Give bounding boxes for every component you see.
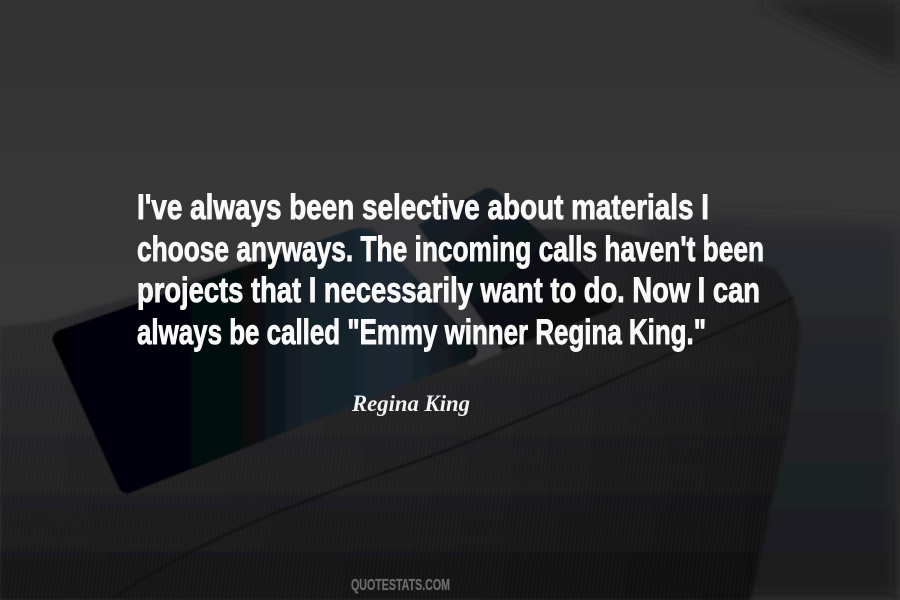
sofa <box>0 222 801 600</box>
author: Regina King <box>351 391 470 416</box>
quote text: I've always been selective about materials I <box>137 188 709 227</box>
quote text <box>137 188 764 352</box>
front tablet <box>53 228 477 493</box>
quote text: always be called "Emmy winner Regina King." <box>137 313 706 352</box>
source watermark: QUOTESTATS.COM <box>351 577 450 594</box>
back tablet <box>418 188 612 350</box>
background: floor <box>640 215 900 600</box>
